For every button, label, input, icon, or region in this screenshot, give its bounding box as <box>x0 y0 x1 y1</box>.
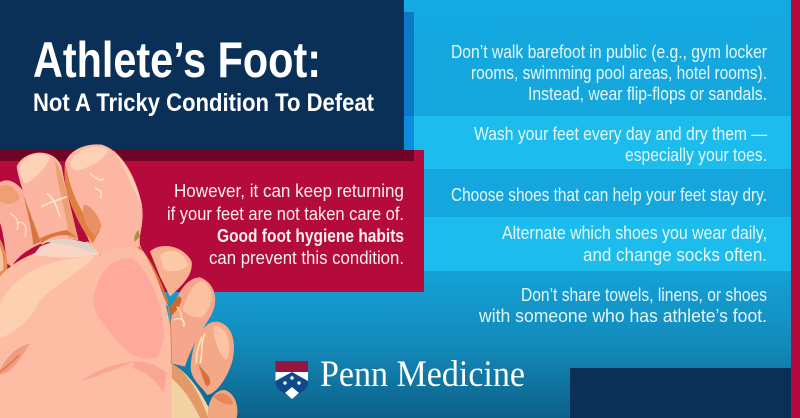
right crimson edge strip <box>791 0 800 418</box>
tip 2: especially your toes. <box>625 144 767 165</box>
tip 5: with someone who has athlete’s foot. <box>478 305 767 326</box>
crimson panel text: can prevent this condition. <box>209 247 404 268</box>
tip 4: and change socks often. <box>583 244 767 265</box>
tips list <box>451 41 767 326</box>
crimson panel text: if your feet are not taken care of. <box>167 203 404 224</box>
big toe <box>65 144 168 307</box>
title panel <box>0 0 404 150</box>
sole of foot <box>0 242 171 418</box>
Penn Medicine logo <box>276 354 525 399</box>
crimson panel text: Good foot hygiene habits <box>217 225 404 246</box>
icon: Penn shield <box>276 361 308 399</box>
toes 2 to 4 <box>0 180 42 267</box>
title: Athlete’s Foot: <box>33 32 321 88</box>
wordmark: Penn Medicine <box>320 354 525 395</box>
blue accent strip <box>404 12 414 150</box>
tip 1 <box>451 41 767 104</box>
crimson panel text: However, it can keep returning <box>174 180 404 201</box>
lighter band behind tip 2 <box>404 116 791 169</box>
tip 4 <box>502 222 767 265</box>
bottom-right navy block <box>570 368 791 418</box>
far small toes <box>171 363 213 418</box>
tip 2 <box>474 123 767 165</box>
subtitle: Not A Tricky Condition To Defeat <box>33 89 375 117</box>
lighter band behind tip 4 <box>414 217 791 271</box>
crimson panel text <box>167 180 404 268</box>
tip 5 <box>478 284 767 326</box>
illustration: foot with irritated toes <box>0 144 237 418</box>
crimson message panel <box>0 150 424 292</box>
